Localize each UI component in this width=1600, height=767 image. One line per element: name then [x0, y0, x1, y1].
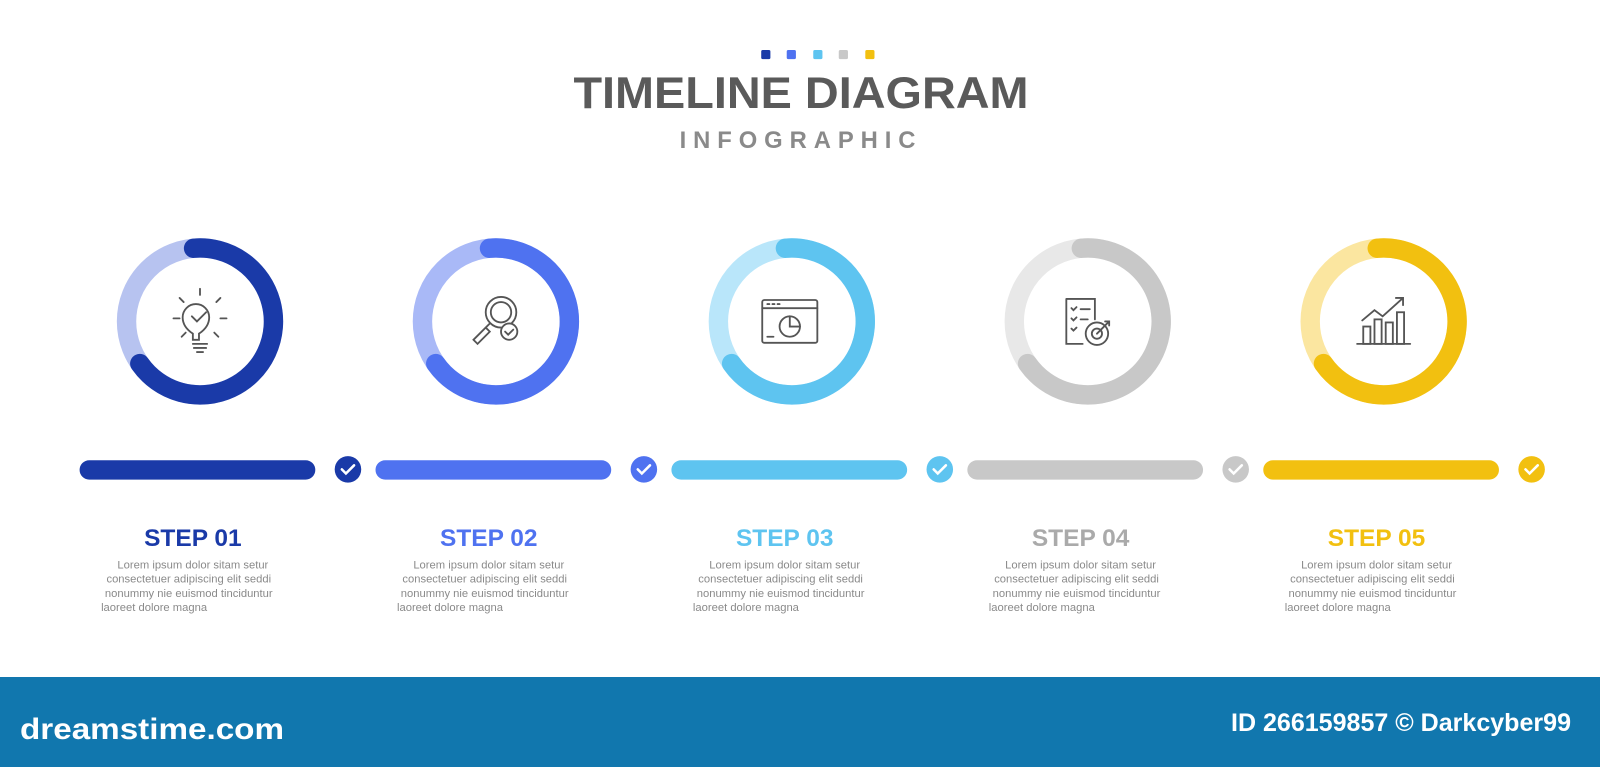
icon: checklist target [1066, 299, 1109, 345]
step 3: nonummy nie euismod tinciduntur [697, 588, 865, 600]
step 1: consectetuer adipiscing elit seddi [106, 574, 271, 586]
step 4: Lorem ipsum dolor sitam setur [1005, 559, 1156, 571]
step 1: laoreet dolore magna [101, 602, 208, 614]
check 1 [335, 456, 361, 483]
step 5: STEP 05 [1328, 525, 1425, 552]
step 3: consectetuer adipiscing elit seddi [698, 574, 863, 586]
title: TIMELINE DIAGRAM [573, 67, 1029, 118]
step 4: nonummy nie euismod tinciduntur [993, 588, 1161, 600]
step 5: consectetuer adipiscing elit seddi [1290, 574, 1455, 586]
step 2: consectetuer adipiscing elit seddi [402, 574, 567, 586]
step 4: consectetuer adipiscing elit seddi [994, 574, 1159, 586]
footer bar: dreamstime.com [20, 713, 284, 746]
icon: magnifier [473, 297, 517, 344]
step 3 [671, 248, 953, 614]
step 5: laoreet dolore magna [1285, 602, 1392, 614]
main content [80, 50, 1545, 614]
step 4: STEP 04 [1032, 525, 1130, 552]
header color squares [761, 50, 874, 59]
step 1: STEP 01 [144, 525, 242, 552]
step 2: laoreet dolore magna [397, 602, 504, 614]
step 1 [80, 248, 361, 614]
step 2: STEP 02 [440, 525, 538, 552]
icon: browser chart [762, 300, 817, 343]
step 1: nonummy nie euismod tinciduntur [105, 588, 273, 600]
icon: light bulb [173, 289, 227, 352]
step 4 [967, 248, 1249, 614]
subtitle: INFOGRAPHIC [680, 127, 922, 154]
footer bar [0, 677, 1600, 767]
icon: growth chart [1357, 298, 1410, 344]
step 2: nonummy nie euismod tinciduntur [401, 588, 569, 600]
step 3: laoreet dolore magna [693, 602, 800, 614]
step 4: laoreet dolore magna [989, 602, 1096, 614]
step 2 [376, 248, 657, 614]
step 3: Lorem ipsum dolor sitam setur [709, 559, 860, 571]
step 1: Lorem ipsum dolor sitam setur [117, 559, 269, 571]
step 3: STEP 03 [736, 525, 833, 552]
step 5 [1263, 248, 1545, 614]
step 5: Lorem ipsum dolor sitam setur [1301, 559, 1452, 571]
step 2: Lorem ipsum dolor sitam setur [413, 559, 564, 571]
step 5: nonummy nie euismod tinciduntur [1289, 588, 1457, 600]
footer bar: ID 266159857 © Darkcyber99 [1231, 709, 1571, 737]
